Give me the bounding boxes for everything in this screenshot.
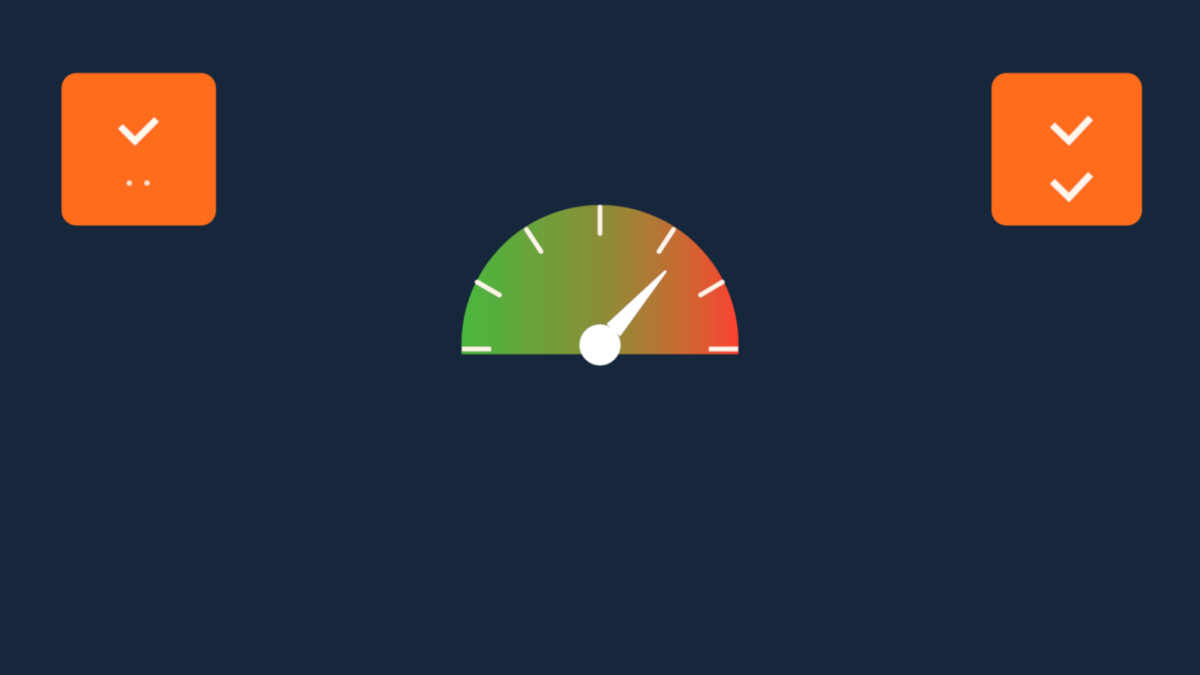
gauge dial bbox=[462, 205, 738, 354]
icon: two dots bbox=[127, 180, 150, 186]
panel: right orange card bbox=[992, 73, 1142, 226]
needle hub bbox=[580, 324, 620, 366]
chart: speedometer gauge bbox=[462, 205, 738, 366]
icon: check mark bbox=[120, 120, 156, 141]
gauge needle bbox=[580, 270, 666, 366]
panel: left orange card bbox=[62, 73, 216, 226]
icon: upper check mark bbox=[1052, 118, 1090, 141]
gauge tick marks bbox=[462, 207, 738, 349]
icon: lower check mark bbox=[1052, 174, 1090, 198]
